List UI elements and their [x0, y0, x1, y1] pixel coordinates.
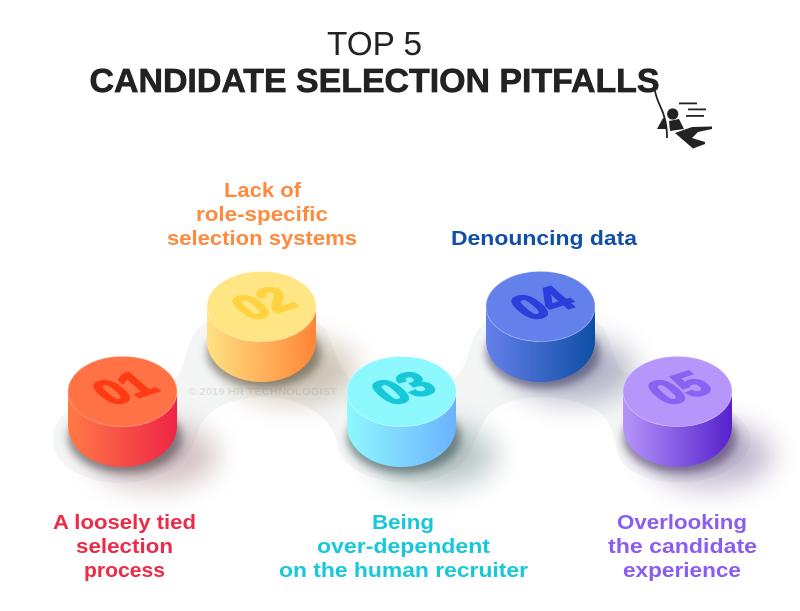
- number 02: 02: [219, 279, 307, 328]
- number 03: 03: [359, 364, 447, 413]
- label: lack of role-specific selection systems: role-specific: [196, 204, 328, 226]
- item 2: cylinder 02: [207, 272, 356, 402]
- label: being over-dependent on the human recruiter: [279, 512, 528, 582]
- number 04: 04: [498, 279, 587, 328]
- background ribbon: [53, 322, 750, 483]
- label: a loosely tied selection process: selection: [76, 536, 173, 558]
- item 4: cylinder 04: [486, 272, 635, 402]
- label: denouncing data: Denouncing data: [451, 228, 638, 250]
- label: overlooking the candidate experience: [608, 512, 757, 582]
- title: [90, 25, 660, 99]
- label: being over-dependent on the human recruiter: on the human recruiter: [279, 560, 528, 582]
- label: being over-dependent on the human recruiter: over-dependent: [317, 536, 490, 558]
- title: CANDIDATE SELECTION PITFALLS: [90, 62, 660, 99]
- label: a loosely tied selection process: [53, 512, 196, 582]
- watermark: © 2019 HR TECHNOLOGIST: [188, 386, 338, 398]
- item 1: cylinder 01: [68, 356, 217, 487]
- label: overlooking the candidate experience: Overlooking: [617, 512, 747, 534]
- label: overlooking the candidate experience: the candidate: [608, 536, 757, 558]
- label: a loosely tied selection process: A loosely tied: [53, 512, 196, 534]
- icon: falling person on rope: [655, 91, 712, 148]
- number 05: 05: [635, 364, 723, 413]
- title: TOP 5: [327, 25, 422, 62]
- label: lack of role-specific selection systems: selection systems: [167, 228, 357, 250]
- label: overlooking the candidate experience: experience: [623, 560, 741, 582]
- label: lack of role-specific selection systems: [167, 180, 357, 250]
- item 5: cylinder 05: [623, 356, 772, 487]
- label: being over-dependent on the human recruiter: Being: [372, 512, 434, 534]
- label: a loosely tied selection process: process: [84, 560, 165, 582]
- item 3: cylinder 03: [347, 356, 496, 487]
- number 01: 01: [80, 364, 168, 413]
- label: lack of role-specific selection systems: Lack of: [224, 180, 301, 202]
